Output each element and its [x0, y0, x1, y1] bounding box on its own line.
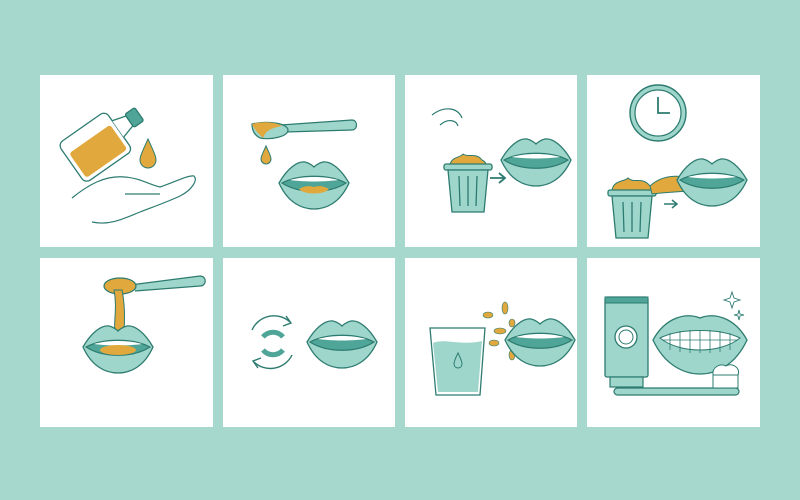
icon: mouth	[307, 321, 377, 368]
icon: mouth	[505, 319, 575, 366]
icon: mouth with oil	[279, 162, 349, 209]
icon: mouth	[677, 159, 747, 206]
icon: spoon	[252, 120, 356, 139]
panel 8: toothpaste, brush, clean teeth	[587, 258, 760, 427]
arrow	[490, 173, 505, 183]
icon: sparkles	[724, 292, 744, 320]
panel 7: rinse with water	[405, 258, 577, 427]
icon: drop	[261, 146, 271, 164]
panel 4: clock, spit out	[587, 75, 760, 247]
icon: mouth	[501, 139, 571, 186]
icon: spit stream	[650, 176, 700, 194]
icon: splashes	[483, 302, 515, 360]
panel 6: circular swishing	[223, 258, 395, 427]
panel 5: spoon pouring into mouth	[40, 258, 213, 427]
panel 3: discard into trash	[405, 75, 577, 247]
icon: trash can with oil	[444, 154, 492, 212]
icon: clock	[630, 85, 686, 141]
icon: motion lines	[432, 109, 462, 126]
icon: toothpaste tube	[605, 297, 648, 387]
icon: circular arrows	[252, 316, 292, 368]
icon: oil stream	[114, 290, 124, 340]
icon: oil drop	[140, 139, 156, 168]
panel 2: spoon dripping into mouth	[223, 75, 395, 247]
icon: mouth	[83, 326, 153, 373]
icon: glass of water	[430, 328, 485, 395]
icon: trash with oil splash	[608, 178, 656, 238]
icon: open hand	[72, 176, 195, 223]
icon: tilted bottle	[58, 96, 154, 184]
icon: spoon	[130, 276, 205, 291]
icon: smiling teeth	[653, 316, 747, 374]
panel 1: oil bottle pouring into hand	[40, 75, 213, 247]
icon: toothbrush	[614, 365, 739, 395]
